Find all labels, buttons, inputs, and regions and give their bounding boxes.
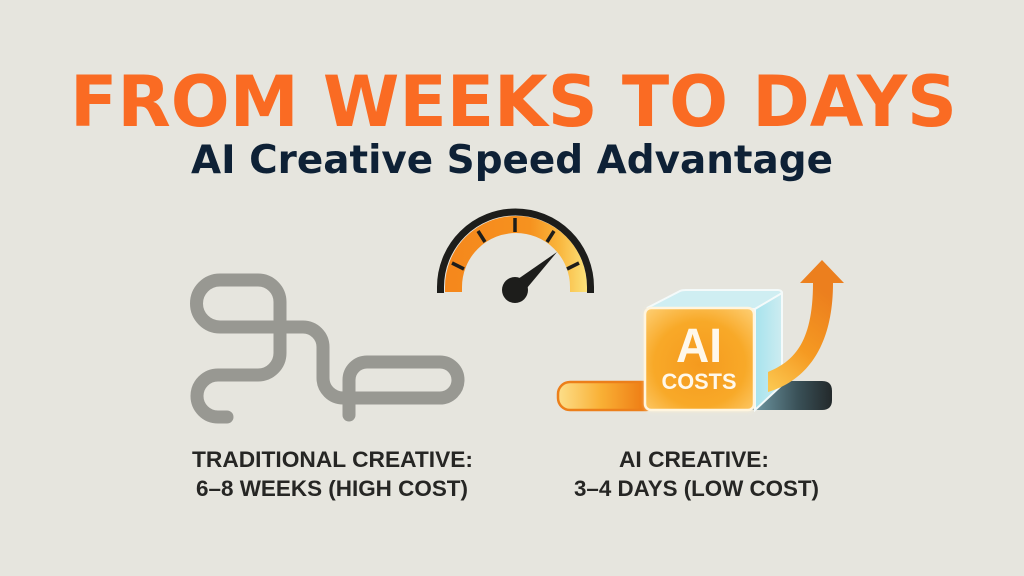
label: AI creative: 3–4 DAYS (LOW COST): [574, 476, 819, 501]
cube glow: [645, 308, 755, 411]
label: traditional creative: 6–8 WEEKS (HIGH COST): [196, 476, 468, 501]
cube front face: [645, 308, 754, 410]
label: traditional creative: [192, 447, 473, 501]
cube label AI: AI: [676, 320, 722, 373]
icon: winding grey road: [196, 280, 458, 417]
icon: speedometer gauge: [440, 212, 590, 303]
label: traditional creative: TRADITIONAL CREATIVE:: [192, 447, 473, 472]
cube label COSTS: COSTS: [662, 369, 736, 394]
cube top face: [647, 290, 782, 309]
right dark bar: [745, 381, 832, 410]
subtitle: AI Creative Speed Advantage: [191, 138, 833, 183]
icon: AI progress bar and cube: [558, 260, 844, 411]
cube side face: [755, 293, 782, 410]
label: AI creative: [574, 447, 819, 501]
curved rising arrow: [768, 260, 844, 392]
title: FROM WEEKS TO DAYS: [70, 61, 957, 143]
label: AI creative: AI CREATIVE:: [619, 447, 769, 472]
left progress bar: [558, 382, 658, 410]
